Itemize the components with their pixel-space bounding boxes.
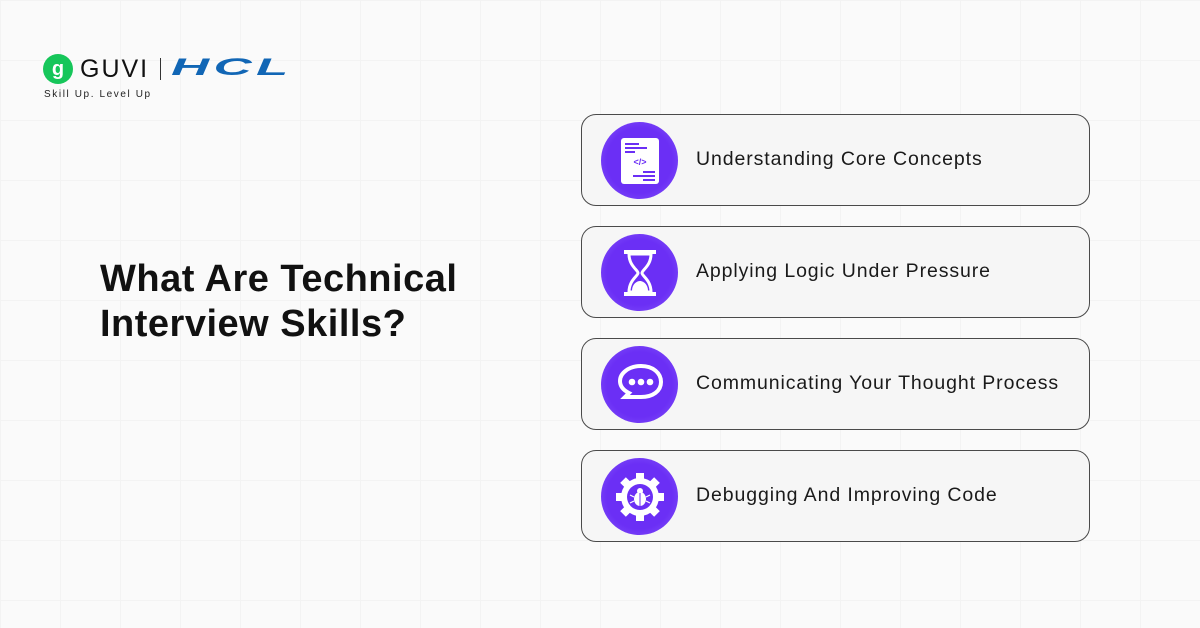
logo (43, 54, 293, 100)
label: Understanding Core Concepts (696, 148, 983, 170)
title: Interview Skills? (100, 303, 406, 345)
tagline: Skill Up. Level Up (44, 89, 152, 100)
icon: guvi circle: g (52, 58, 64, 80)
title (100, 258, 457, 345)
label: Debugging And Improving Code (696, 484, 998, 506)
icon: guvi circle (43, 54, 73, 84)
card 1 (581, 114, 1090, 206)
icon: bug gear (601, 458, 678, 535)
icon: code document: </> (633, 156, 646, 166)
divider (160, 58, 161, 80)
icon: code document (601, 122, 678, 199)
icon: hourglass (601, 234, 678, 311)
title: What Are Technical (100, 258, 457, 300)
label: Communicating Your Thought Process (696, 372, 1059, 394)
card 2 (581, 226, 1090, 318)
guvi wordmark: GUVI (80, 55, 149, 83)
hcl wordmark: HCL (171, 54, 293, 81)
card 4 (581, 450, 1090, 542)
icon: speech bubble (601, 346, 678, 423)
label: Applying Logic Under Pressure (696, 260, 991, 282)
card 3 (581, 338, 1090, 430)
